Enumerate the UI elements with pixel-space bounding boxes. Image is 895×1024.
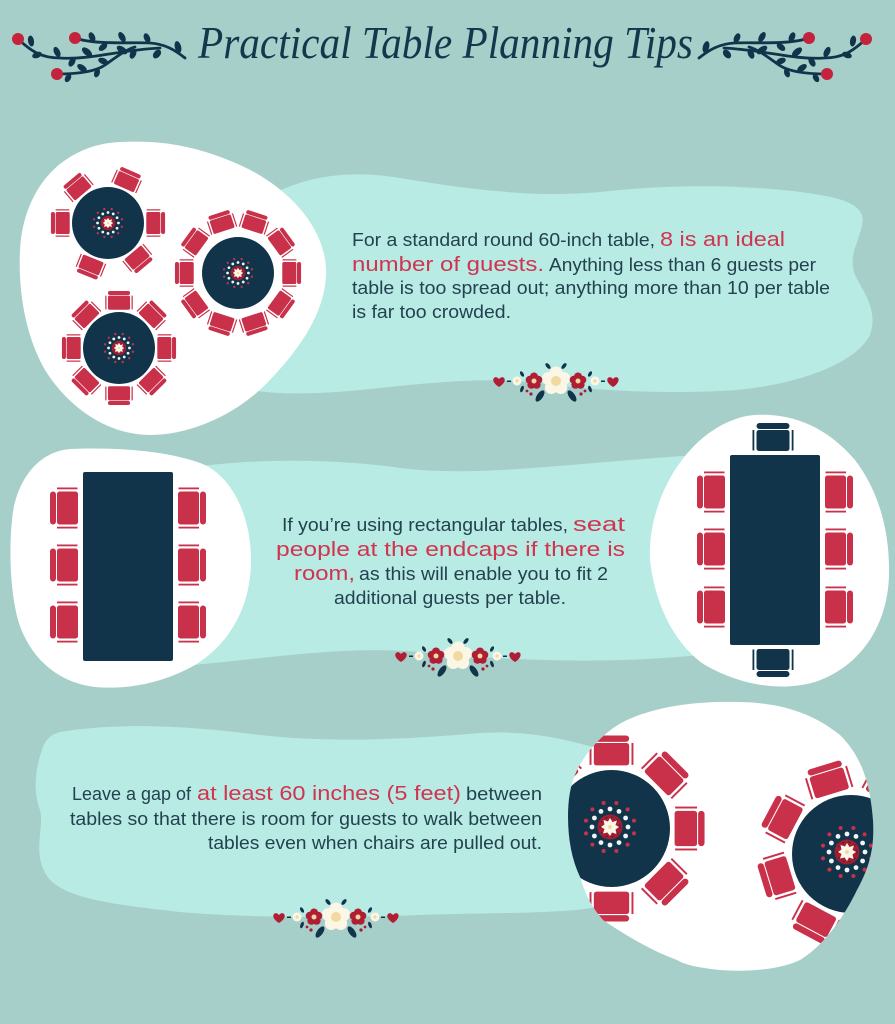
icon: floral ornament 3: [273, 898, 399, 939]
text block: gap tip: [70, 783, 542, 853]
round table 2: [175, 209, 301, 337]
title: Practical Table Planning Tips: [197, 17, 693, 68]
text block: round table tip: number of guests.: [352, 254, 544, 276]
text block: rectangular tip: seat: [573, 514, 626, 536]
panel: gap tip background: [36, 726, 610, 917]
icon: floral ornament 2: [395, 637, 521, 678]
text block: rectangular tip: additional guests per table.: [334, 588, 566, 608]
rectangular table right with endcaps: [697, 423, 853, 677]
text block: rectangular tip: people at the endcaps if there is: [276, 539, 625, 561]
icon: floral ornament 1: [493, 362, 619, 403]
text block: round table tip: is far too crowded.: [352, 302, 511, 322]
text block: gap tip: Leave a gap of: [72, 784, 192, 804]
panel: rectangular tip background: [170, 455, 700, 667]
panel: rectangular white blob left: [10, 448, 251, 688]
text block: rectangular tip: as this will enable you to fit 2: [359, 564, 608, 584]
panel: rectangular white blob right: [650, 415, 889, 687]
text block: round table tip: 8 is an ideal: [660, 229, 785, 251]
icon: left garland: [12, 31, 185, 83]
text block: round table tip: For a standard round 60-inch table,: [352, 230, 655, 250]
text block: rectangular tip: [276, 514, 626, 608]
text block: round table tip: [352, 229, 830, 322]
text block: gap tip: at least 60 inches (5 feet): [197, 783, 461, 805]
text block: rectangular tip: room,: [294, 563, 355, 585]
text block: gap tip: tables even when chairs are pulled out.: [208, 833, 542, 853]
text block: round table tip: Anything less than 6 guests per: [549, 255, 816, 275]
panel: round tables white blob: [20, 142, 326, 435]
icon: right garland: [699, 31, 872, 83]
text block: gap tip: between: [466, 784, 542, 804]
zoomed round tables: [568, 736, 874, 944]
round table 3: [62, 291, 176, 405]
panel: gap white blob: [568, 702, 873, 971]
text block: gap tip: tables so that there is room for guests to walk between: [70, 809, 542, 829]
round table 1: [51, 165, 165, 281]
text block: rectangular tip: If you’re using rectangular tables,: [282, 515, 568, 535]
rectangular table left: [50, 472, 206, 661]
text block: round table tip: table is too spread out; anything more than 10 per table: [352, 278, 830, 298]
panel: round tables tip background: [250, 174, 872, 393]
